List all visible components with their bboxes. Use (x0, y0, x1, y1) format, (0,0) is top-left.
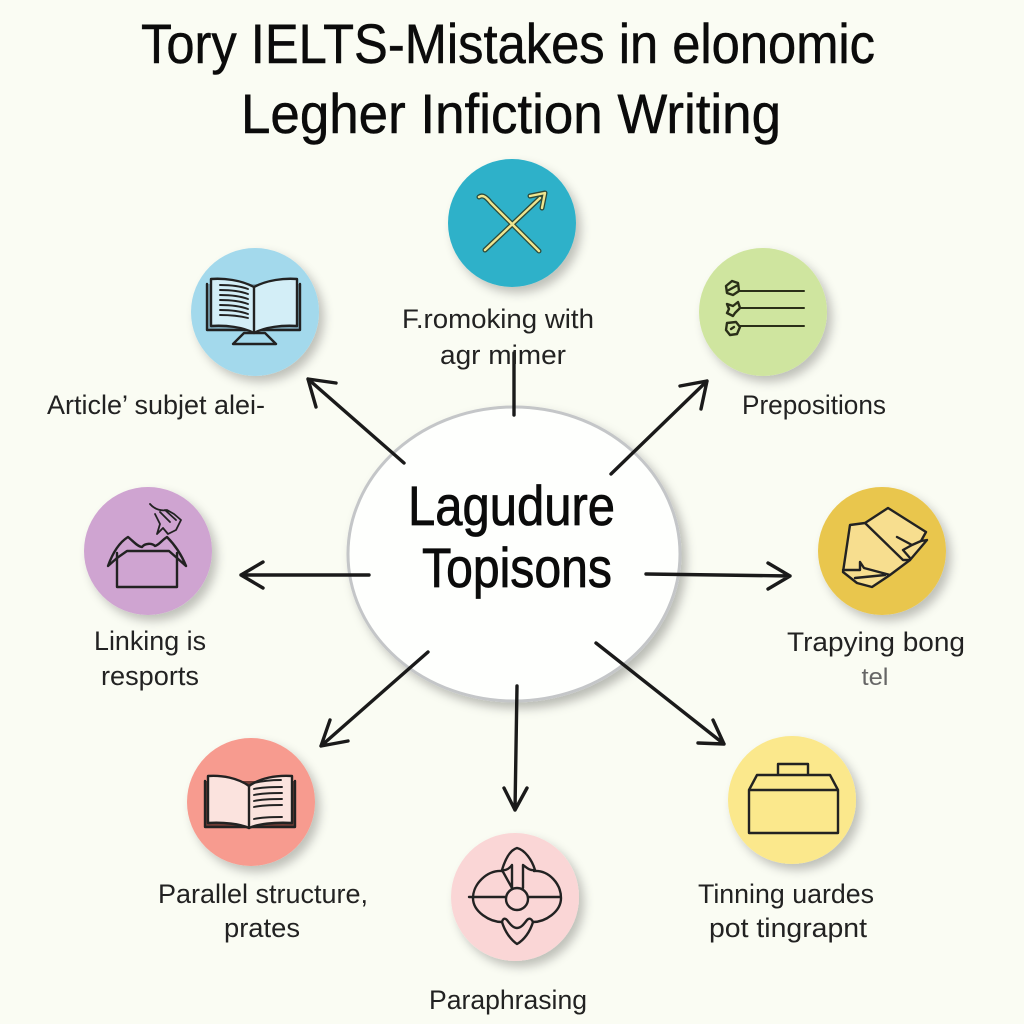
arrow: right (646, 563, 790, 589)
icon: circular arrows (469, 848, 561, 944)
label: left (94, 626, 206, 691)
label: upper right: Prepositions (742, 390, 886, 420)
label: lower left (158, 879, 368, 943)
arrow: upper left (308, 379, 404, 463)
icon: crumpled papers (843, 508, 927, 587)
icon: crossed arrows (479, 193, 545, 251)
label: right: Trapying bong (787, 627, 965, 657)
label: top (402, 304, 594, 370)
node: bottom (451, 833, 579, 961)
label: top: agr mimer (440, 340, 566, 370)
label: lower left: prates (224, 913, 300, 943)
node: lower left (187, 738, 315, 866)
label: top: F.romoking with (402, 304, 594, 334)
label: lower right (698, 879, 874, 943)
label: upper left: Article’ subjet alei- (47, 390, 265, 420)
node: right (818, 487, 946, 615)
arrow: left (241, 562, 369, 588)
label: right (787, 627, 965, 691)
node: top (448, 159, 576, 287)
icon: house with figure (108, 504, 186, 587)
label: right: tel (862, 664, 888, 691)
label: lower right: pot tingrapnt (709, 913, 868, 943)
icon: open book on stand (207, 279, 300, 344)
arrow: lower left (321, 652, 428, 746)
node: upper left (191, 248, 319, 376)
label: left: Linking is (94, 626, 206, 656)
central circle: Lagudure (408, 474, 615, 537)
icon: briefcase (749, 764, 838, 833)
central circle (348, 407, 680, 701)
arrow: bottom (504, 686, 527, 810)
title (141, 12, 875, 145)
arrow: lower right (596, 643, 724, 744)
node: upper right (699, 248, 827, 376)
arrow: top (512, 353, 516, 415)
arrow: upper right (611, 381, 707, 474)
title: Legher Infiction Writing (241, 82, 781, 145)
node: lower right (728, 736, 856, 864)
icon: open book (205, 776, 295, 828)
central circle: Topisons (422, 536, 612, 599)
label: lower left: Parallel structure, (158, 879, 368, 909)
label: left: resports (101, 661, 199, 691)
icon: checklist (726, 281, 804, 335)
label: bottom: Paraphrasing (429, 985, 587, 1015)
title: Tory IELTS-Mistakes in elonomic (141, 12, 875, 75)
label: lower right: Tinning uardes (698, 879, 874, 909)
node: left (84, 487, 212, 615)
